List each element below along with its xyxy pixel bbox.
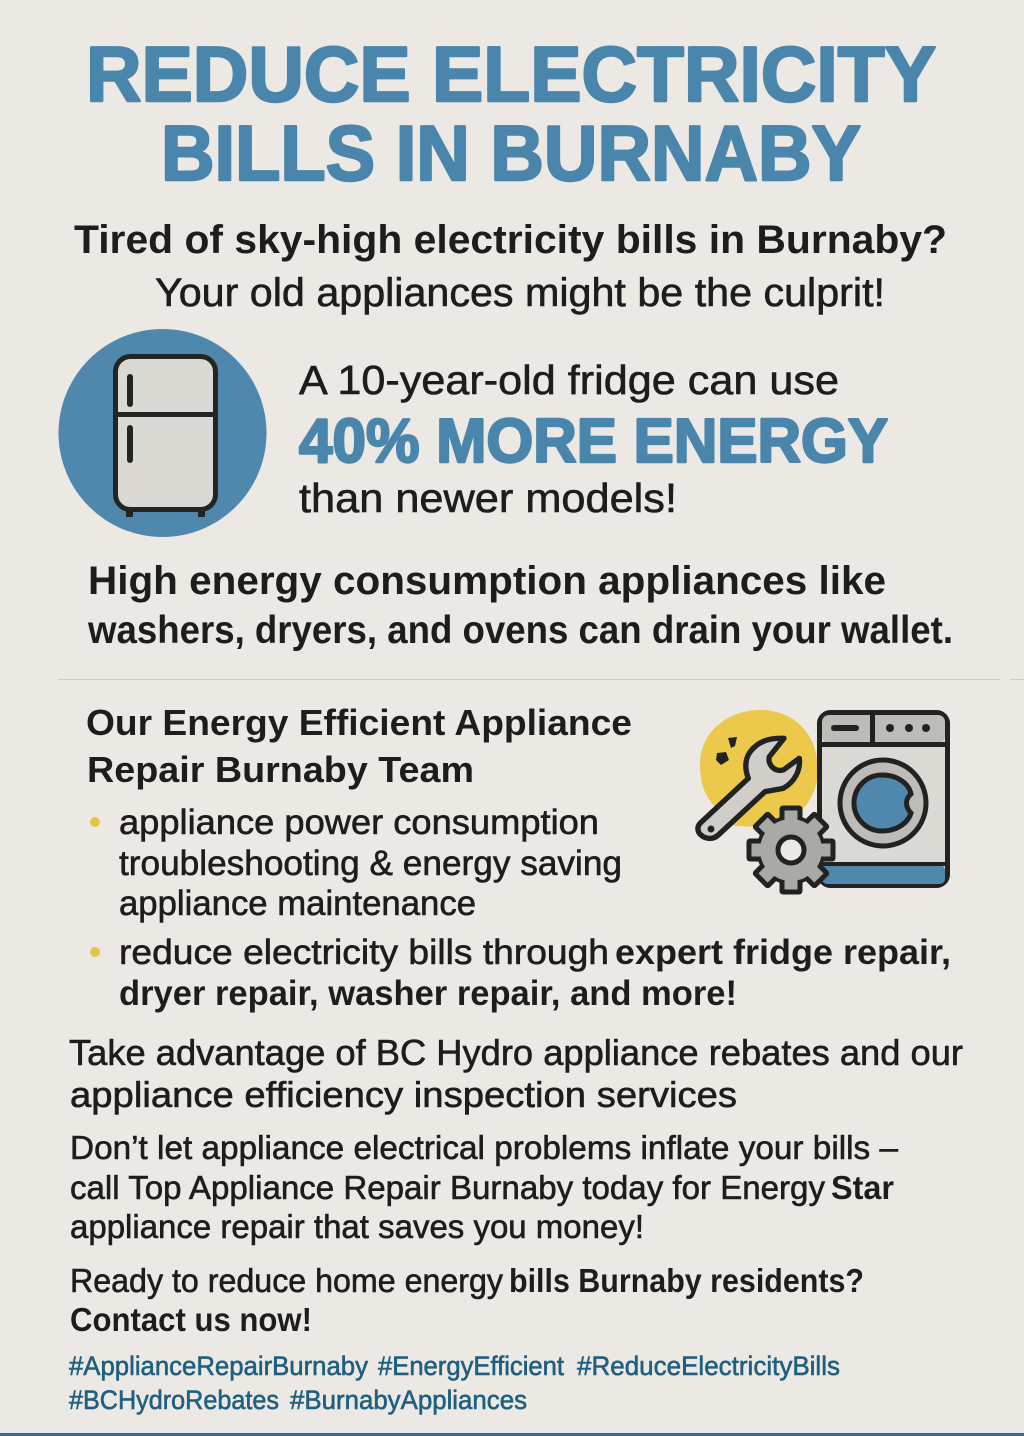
bullet item one: troubleshooting & energy saving — [119, 844, 622, 883]
bullet item one — [90, 803, 622, 923]
call to action paragraph: call Top Appliance Repair Burnaby today for Energy — [70, 1169, 825, 1206]
call to action paragraph: Don’t let appliance electrical problems inflate your bills – — [70, 1129, 899, 1166]
contact prompt — [70, 1262, 864, 1338]
icon: wrench, gear and washing machine — [698, 710, 948, 892]
hashtags: #ReduceElectricityBills — [577, 1351, 840, 1381]
fridge energy statistic: A 10-year-old fridge can use — [299, 357, 839, 403]
hashtags: #EnergyEfficient — [378, 1351, 564, 1381]
bullet item one: appliance maintenance — [119, 884, 476, 923]
hashtags: #BurnabyAppliances — [290, 1385, 527, 1415]
contact prompt: bills Burnaby residents? — [509, 1262, 864, 1299]
bullet item two — [90, 933, 951, 1013]
hashtags — [69, 1351, 840, 1415]
rebates text — [69, 1032, 963, 1115]
icon: wrench — [698, 737, 800, 838]
rebates text: Take advantage of BC Hydro appliance rebates and our — [69, 1032, 963, 1073]
bullet item two: reduce electricity bills through — [119, 933, 609, 972]
high consumption statement — [87, 559, 953, 652]
intro text — [74, 218, 947, 315]
rebates text: appliance efficiency inspection services — [70, 1074, 737, 1115]
high consumption statement: washers, dryers, and ovens can drain your wallet. — [87, 609, 953, 652]
section heading: repair team: Our Energy Efficient Appliance — [86, 702, 632, 743]
intro text: Your old appliances might be the culprit! — [155, 271, 885, 315]
icon: yellow blob — [700, 710, 818, 827]
high consumption statement: High energy consumption appliances like — [88, 559, 886, 603]
hashtags: #BCHydroRebates — [69, 1385, 279, 1415]
fridge energy statistic — [299, 357, 888, 521]
icon: washing machine — [820, 712, 948, 886]
bullet item one: appliance power consumption — [119, 803, 599, 842]
icon: gear — [749, 808, 833, 892]
call to action paragraph — [70, 1129, 899, 1245]
contact prompt: Ready to reduce home energy — [70, 1262, 503, 1299]
fridge energy statistic: than newer models! — [299, 475, 677, 521]
contact prompt: Contact us now! — [70, 1301, 312, 1338]
bullet item two: expert fridge repair, — [615, 933, 951, 972]
call to action paragraph: appliance repair that saves you money! — [70, 1208, 644, 1245]
section heading: repair team: Repair Burnaby Team — [87, 749, 474, 790]
title — [86, 30, 936, 197]
fridge energy statistic: 40% MORE ENERGY — [299, 407, 888, 476]
intro text: Tired of sky-high electricity bills in Burnaby? — [74, 218, 947, 262]
title: BILLS IN BURNABY — [161, 109, 861, 197]
title: REDUCE ELECTRICITY — [86, 30, 936, 118]
call to action paragraph: Star — [831, 1169, 894, 1206]
icon: fridge in blue circle — [58, 329, 266, 537]
bullet item two: dryer repair, washer repair, and more! — [119, 974, 737, 1013]
hashtags: #ApplianceRepairBurnaby — [69, 1351, 368, 1381]
bullet list — [90, 803, 951, 1013]
bottom rule — [0, 1433, 1024, 1436]
section heading: repair team — [86, 702, 632, 790]
